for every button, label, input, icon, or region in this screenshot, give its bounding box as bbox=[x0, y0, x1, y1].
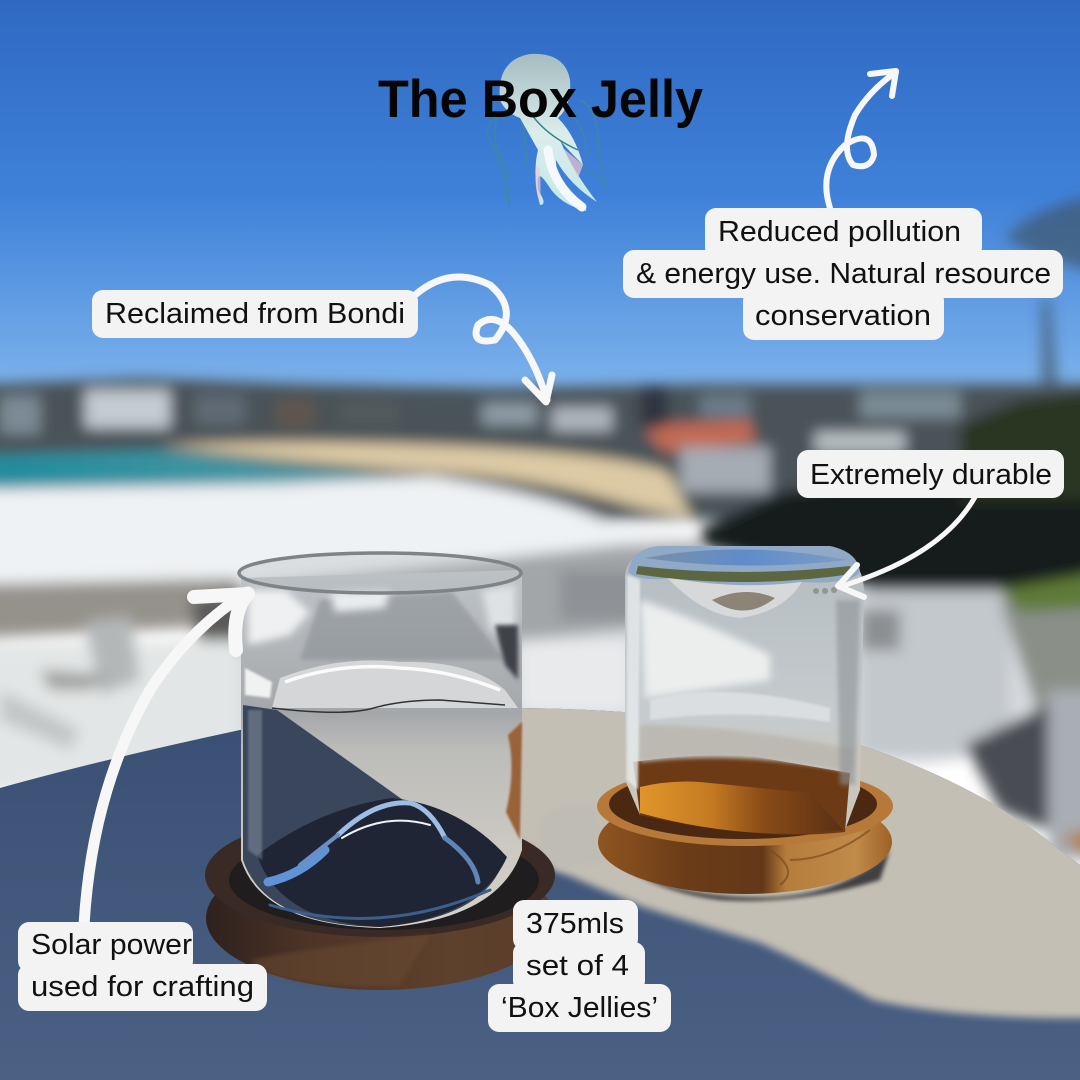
right glass dome bbox=[663, 573, 803, 618]
icon: jellyfish bbox=[487, 54, 605, 211]
sea bbox=[0, 450, 400, 492]
callout: Solar power bbox=[18, 922, 267, 1011]
right glass amber wood grain bbox=[640, 782, 843, 834]
right coaster bbox=[597, 766, 893, 894]
glass left on dark coaster bbox=[205, 553, 555, 990]
callout: Solar power: used for crafting bbox=[31, 971, 254, 1003]
title: The Box Jelly bbox=[378, 70, 703, 129]
right glass timber seen through bbox=[633, 755, 850, 835]
right glass reflections bbox=[627, 575, 860, 790]
callout: 375mls set of 4: ‘Box Jellies’ bbox=[501, 992, 658, 1024]
left coaster bbox=[205, 813, 555, 990]
title group: jellyfish illustration and heading bbox=[378, 54, 703, 211]
terrace floor bbox=[240, 590, 1060, 765]
left glass body bbox=[241, 570, 522, 928]
glass right on timber coaster bbox=[597, 546, 893, 894]
right glass dots bbox=[813, 587, 837, 594]
arrow: Solar power bbox=[84, 592, 248, 925]
callout: Extremely durable bbox=[797, 450, 1064, 498]
callout: Extremely durable: Extremely durable bbox=[810, 459, 1052, 491]
cloth in shadow bbox=[0, 700, 1080, 1080]
tree trunk bbox=[1042, 300, 1058, 395]
left glass reflections bbox=[245, 585, 522, 860]
cloth sunlit bbox=[522, 708, 1080, 1024]
white loungers bbox=[0, 640, 240, 800]
callout: Solar power: Solar power bbox=[31, 929, 192, 961]
right coaster cast shadow bbox=[634, 850, 892, 904]
tree canopy bbox=[1005, 195, 1080, 275]
glass dimple highlights bbox=[268, 803, 490, 918]
left glass rim bbox=[239, 553, 521, 593]
table cloth bbox=[0, 690, 1080, 1080]
callout: 375mls set of 4 bbox=[488, 900, 671, 1032]
callout: Reduced pollution: conservation bbox=[755, 300, 931, 332]
callout: Reduced pollution: & energy use. Natural resource bbox=[636, 258, 1051, 290]
callout: 375mls set of 4: 375mls bbox=[526, 908, 624, 940]
grey wall band bbox=[240, 542, 700, 650]
left glass base bbox=[257, 798, 507, 927]
cloth patch by coaster bbox=[550, 860, 564, 874]
callout: Reclaimed from Bondi bbox=[92, 290, 418, 338]
town skyline bbox=[0, 378, 1080, 520]
callout: Reduced pollution: Reduced pollution bbox=[718, 216, 961, 248]
arrow: from Reclaimed label bbox=[415, 277, 552, 402]
callout: Reclaimed from Bondi: Reclaimed from Bondi bbox=[105, 298, 405, 330]
callout: 375mls set of 4: set of 4 bbox=[526, 950, 629, 982]
background photo: sky bbox=[0, 0, 1080, 440]
right glass body bbox=[625, 548, 864, 830]
dark foliage right bbox=[700, 400, 1080, 605]
arrow: up to the sky bbox=[826, 71, 896, 208]
white rooftop bbox=[0, 476, 700, 590]
background: distant tree bbox=[1005, 195, 1080, 395]
arrow: Extremely durable bbox=[838, 497, 975, 597]
right glass dome shadow bbox=[712, 592, 775, 611]
background photo: blurred Bondi beach scene bbox=[0, 378, 1080, 865]
red roof bbox=[645, 420, 755, 452]
right post and shrubs bbox=[1000, 570, 1080, 720]
callout: Reduced pollution bbox=[623, 208, 1063, 340]
left glass shadow wedge bbox=[243, 705, 505, 927]
right glass top base bbox=[628, 546, 860, 585]
sand bbox=[160, 442, 692, 518]
right glass olive band bbox=[636, 566, 852, 582]
right glass blue highlight bbox=[645, 549, 848, 566]
